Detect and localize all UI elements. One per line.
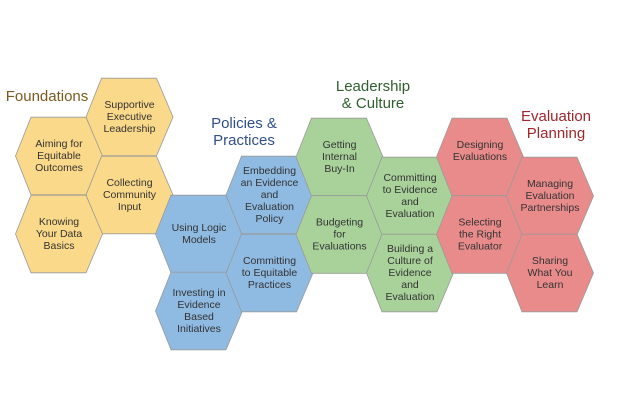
hex: Committing to Evidence and Evaluation: Evaluation — [385, 208, 435, 220]
hex: Using Logic Models: Models — [182, 234, 216, 246]
hex: Aiming for Equitable Outcomes — [16, 117, 102, 195]
title: Policies & Practices: Policies & — [211, 115, 277, 132]
panel: leadership hexes — [296, 118, 454, 312]
hex: Managing Evaluation Partnerships: Evaluation — [525, 190, 575, 202]
hex: Sharing What You Learn: What You — [528, 267, 573, 279]
hex: Committing to Equitable Practices: to Equitable — [242, 267, 297, 279]
panel: evaluation planning hexes — [436, 118, 594, 312]
hex: Committing to Evidence and Evaluation — [366, 157, 454, 235]
hex: Sharing What You Learn: Learn — [537, 279, 564, 291]
hex: Supportive Executive Leadership — [86, 78, 173, 156]
hex: Designing Evaluations: Designing — [457, 139, 503, 151]
hex: Selecting the Right Evaluator: Selecting — [458, 216, 502, 228]
hex: Investing in Evidence Based Initiatives: Evidence — [177, 299, 221, 311]
hex: Managing Evaluation Partnerships: Managing — [527, 178, 573, 190]
hex: Committing to Equitable Practices — [226, 234, 313, 312]
hex: Getting Internal Buy-In — [296, 118, 383, 196]
hex: Knowing Your Data Basics: Knowing — [39, 216, 79, 228]
hex: Embedding an Evidence and Evaluation Policy — [226, 156, 313, 234]
hex: Knowing Your Data Basics: Basics — [44, 240, 74, 252]
title: Leadership & Culture: Leadership — [336, 78, 410, 95]
hex: Building a Culture of Evidence and Evaluation — [366, 234, 454, 312]
hex: Committing to Equitable Practices: Committing — [243, 255, 296, 267]
hex: Selecting the Right Evaluator: Evaluator — [458, 240, 503, 252]
title: Foundations: Foundations — [6, 88, 88, 105]
hex: Investing in Evidence Based Initiatives: Based — [184, 311, 214, 323]
hex: Supportive Executive Leadership: Supportive — [104, 99, 155, 111]
hex: Building a Culture of Evidence and Evaluation: and — [401, 279, 419, 291]
title: Policies & Practices: Practices — [213, 132, 275, 149]
hex: Selecting the Right Evaluator: the Right — [459, 228, 501, 240]
hex: Using Logic Models — [156, 195, 242, 273]
hex: Investing in Evidence Based Initiatives: Initiatives — [177, 323, 221, 335]
panel: foundations hexes — [16, 78, 173, 273]
hex: Embedding an Evidence and Evaluation Policy: and — [261, 189, 278, 201]
title: Evaluation Planning: Planning — [527, 125, 585, 142]
hex: Collecting Community Input: Input — [118, 201, 141, 213]
hex: Embedding an Evidence and Evaluation Policy: Evaluation — [245, 201, 294, 213]
hex: Aiming for Equitable Outcomes: Aiming for — [35, 138, 83, 150]
hex: Knowing Your Data Basics — [16, 195, 102, 273]
hex: Building a Culture of Evidence and Evaluation: Culture of — [387, 255, 433, 267]
hex: Investing in Evidence Based Initiatives: Investing in — [172, 287, 226, 299]
hex: Getting Internal Buy-In: Buy-In — [324, 163, 355, 175]
hex: Supportive Executive Leadership: Executive — [107, 111, 152, 123]
hex: Designing Evaluations: Evaluations — [453, 151, 507, 163]
hex: Knowing Your Data Basics: Your Data — [36, 228, 82, 240]
hex: Collecting Community Input: Collecting — [106, 177, 153, 189]
hex: Sharing What You Learn: Sharing — [532, 255, 568, 267]
hex: Getting Internal Buy-In: Internal — [322, 151, 357, 163]
hex: Building a Culture of Evidence and Evaluation: Evidence — [388, 267, 432, 279]
hex: Aiming for Equitable Outcomes: Equitable — [37, 150, 81, 162]
hex: Budgeting for Evaluations: for — [333, 228, 346, 240]
hex: Budgeting for Evaluations: Budgeting — [316, 216, 363, 228]
hex: Selecting the Right Evaluator — [436, 196, 524, 273]
title: Leadership & Culture: & Culture — [342, 95, 404, 112]
hex: Investing in Evidence Based Initiatives — [156, 272, 242, 350]
hex: Using Logic Models: Using Logic — [172, 222, 226, 234]
hex: Aiming for Equitable Outcomes: Outcomes — [35, 162, 83, 174]
hex: Committing to Evidence and Evaluation: Committing — [383, 172, 437, 184]
hex: Committing to Equitable Practices: Practices — [248, 279, 291, 291]
hex: Managing Evaluation Partnerships: Partnerships — [521, 202, 579, 214]
hex: Committing to Evidence and Evaluation: and — [401, 196, 419, 208]
hex: Designing Evaluations — [436, 118, 524, 196]
hex: Collecting Community Input: Community — [103, 189, 157, 201]
panel: policies hexes — [156, 156, 313, 350]
hex: Building a Culture of Evidence and Evaluation: Building a — [387, 243, 433, 255]
hex: Sharing What You Learn — [506, 234, 594, 312]
hex: Collecting Community Input — [86, 156, 173, 234]
hex: Budgeting for Evaluations — [296, 196, 383, 273]
hex: Embedding an Evidence and Evaluation Policy: Policy — [255, 213, 284, 225]
hex: Managing Evaluation Partnerships — [506, 157, 594, 235]
hex: Supportive Executive Leadership: Leadership — [104, 123, 156, 135]
hex: Embedding an Evidence and Evaluation Policy: Embedding — [243, 165, 296, 177]
title: Evaluation Planning: Evaluation — [521, 108, 591, 125]
hex: Getting Internal Buy-In: Getting — [323, 139, 356, 151]
hex: Building a Culture of Evidence and Evaluation: Evaluation — [385, 291, 435, 303]
hex: Budgeting for Evaluations: Evaluations — [312, 240, 367, 252]
hex: Embedding an Evidence and Evaluation Policy: an Evidence — [241, 177, 299, 189]
hex: Committing to Evidence and Evaluation: to Evidence — [383, 184, 438, 196]
